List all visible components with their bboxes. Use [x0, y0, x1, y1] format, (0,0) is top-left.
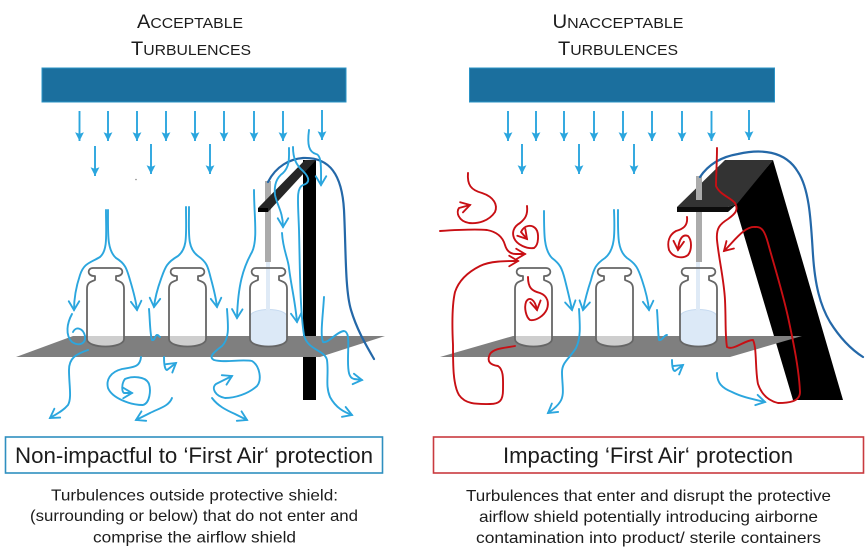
outcome box: impacting: [434, 437, 864, 473]
blue shield airflow: [544, 210, 765, 413]
description: acceptable turbulences: Turbulences outside protective shield:: [51, 488, 338, 504]
description: acceptable turbulences: (surrounding or below) that do not enter and: [30, 508, 358, 525]
vial 3 being filled: [680, 262, 717, 346]
vial 1: [515, 268, 552, 346]
panel: unacceptable turbulences: [434, 12, 864, 547]
supply tubing: [700, 152, 863, 357]
panel: acceptable turbulences: [6, 12, 385, 546]
description: acceptable turbulences: [30, 488, 358, 546]
description: unacceptable turbulences: [466, 488, 831, 547]
vial 2: [596, 268, 633, 346]
downward airflow arrows: [508, 110, 749, 174]
vial 2: [169, 268, 206, 346]
outcome box: impacting: Impacting ‘First Air‘ protection: [503, 443, 793, 468]
vial 1: [87, 268, 124, 346]
work surface: [16, 336, 385, 357]
description: unacceptable turbulences: Turbulences that enter and disrupt the protective: [466, 488, 831, 505]
work surface: [440, 336, 802, 357]
heading: acceptable turbulences: TURBULENCES: [131, 39, 251, 60]
heading: unacceptable turbulences: TURBULENCES: [558, 39, 678, 60]
airflow source bar: [42, 68, 346, 102]
supply tubing: [268, 158, 374, 359]
description: acceptable turbulences: comprise the airflow shield: [93, 530, 296, 546]
heading: unacceptable turbulences: UNACCEPTABLE: [552, 12, 684, 33]
blue turbulence below and beside vials: [50, 309, 260, 420]
description: unacceptable turbulences: contamination into product/ sterile containers: [476, 530, 821, 547]
blue shield airflow around vials: [74, 130, 362, 415]
large stand with platform: [677, 160, 843, 400]
downward airflow arrows: [80, 110, 322, 176]
vial 3 being filled: [250, 262, 287, 346]
outcome box: non-impactful: Non-impactful to ‘First Air‘ protection: [15, 443, 373, 468]
outcome box: non-impactful: [6, 437, 382, 473]
heading: acceptable turbulences: [131, 12, 251, 60]
stand with arm: [258, 160, 316, 400]
airflow source bar: [470, 68, 774, 102]
red disruptive turbulence: [440, 148, 800, 404]
description: unacceptable turbulences: airflow shield potentially introducing airborne: [479, 509, 818, 526]
heading: unacceptable turbulences: [552, 12, 684, 60]
heading: acceptable turbulences: ACCEPTABLE: [137, 12, 243, 33]
